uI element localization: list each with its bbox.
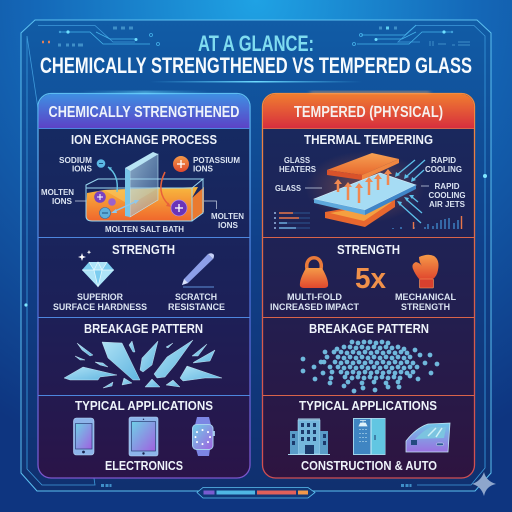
molten salt tank (86, 179, 204, 221)
section: typical applications electronics (74, 398, 215, 473)
section: breakage pattern pellets (303, 321, 437, 391)
captions: MULTI-FOLD (287, 292, 342, 303)
section: thermal tempering (274, 132, 466, 229)
labels: MOLTEN SALT BATH (105, 224, 184, 234)
section: breakage pattern pellets: BREAKAGE PATTERN (309, 321, 429, 336)
labels: COOLING (428, 190, 466, 200)
section: breakage pattern shards (64, 321, 222, 388)
right header (263, 94, 474, 128)
labels: MOLTEN (211, 211, 244, 221)
captions: MECHANICAL (395, 292, 456, 303)
section: typical applications construction and auto: CONSTRUCTION & AUTO (301, 459, 437, 473)
section: thermal tempering: THERMAL TEMPERING (304, 132, 433, 147)
ions and arrows (94, 156, 189, 218)
labels: AIR JETS (429, 199, 465, 209)
labels: IONS (218, 220, 238, 230)
captions: STRENGTH (401, 302, 450, 313)
icon: pen (182, 253, 214, 287)
captions: SUPERIOR (77, 292, 123, 303)
labels: HEATERS (279, 164, 316, 174)
icon: tablet (129, 417, 158, 456)
captions (53, 292, 226, 313)
labels: MOLTEN (41, 187, 74, 197)
icon: phone (74, 418, 94, 455)
captions: SCRATCH (175, 292, 217, 303)
captions (270, 292, 456, 313)
glass pane (125, 152, 158, 217)
icon: diamond (78, 250, 114, 287)
labels: SODIUM (59, 155, 92, 165)
icon: shower (354, 418, 385, 454)
circuit decoration: top right (352, 25, 470, 46)
section: strength: STRENGTH (112, 242, 175, 257)
right header: TEMPERED (PHYSICAL) (294, 104, 443, 121)
glass heaters (325, 153, 399, 227)
icon: building (288, 419, 330, 454)
section: breakage pattern shards: BREAKAGE PATTERN (84, 321, 203, 336)
captions: RESISTANCE (168, 302, 226, 313)
labels: RAPID (431, 155, 456, 165)
icon: car door (406, 423, 450, 452)
tempered glass dice pellets (303, 342, 437, 391)
panel: tempered physical (262, 91, 474, 478)
title (40, 31, 472, 78)
tempered glass sheet (314, 173, 416, 215)
section: typical applications construction and auto: TYPICAL APPLICATIONS (299, 398, 437, 413)
section: typical applications electronics: ELECTRONICS (105, 459, 183, 473)
labels: GLASS (284, 155, 310, 165)
labels: COOLING (425, 164, 462, 174)
section: strength (53, 242, 226, 313)
icon: kettlebell (300, 258, 328, 288)
left header: CHEMICALLY STRENGTHENED (48, 104, 240, 121)
arrows: heat and cooling (334, 160, 425, 223)
bottom status tag (101, 486, 412, 498)
labels (41, 155, 244, 234)
labels: POTASSIUM (193, 155, 240, 165)
shattered glass shards (64, 340, 222, 388)
mini charts (274, 213, 462, 229)
left header (38, 94, 250, 128)
labels: IONS (72, 164, 92, 174)
big 5x: 5x (355, 263, 386, 295)
labels: RAPID (434, 181, 460, 191)
labels: IONS (193, 164, 213, 174)
panel: chemically strengthened (38, 91, 250, 478)
section: strength tempered (270, 242, 456, 313)
title: AT A GLANCE: (198, 31, 314, 56)
labels: GLASS (275, 183, 301, 193)
section: typical applications construction and auto (288, 398, 450, 473)
icon: sparkle star (472, 472, 496, 496)
section: typical applications electronics: TYPICAL APPLICATIONS (75, 398, 213, 413)
labels (275, 155, 466, 209)
labels: IONS (52, 196, 72, 206)
captions: INCREASED IMPACT (270, 302, 359, 313)
icon: boxing glove (412, 255, 438, 288)
section: ion exchange process: ION EXCHANGE PROCESS (71, 132, 217, 147)
section: strength tempered: STRENGTH (337, 242, 400, 257)
icon: smartwatch (192, 417, 215, 456)
section: ion exchange process (41, 132, 244, 234)
captions: SURFACE HARDNESS (53, 302, 148, 313)
circuit decoration: top left (42, 28, 160, 46)
